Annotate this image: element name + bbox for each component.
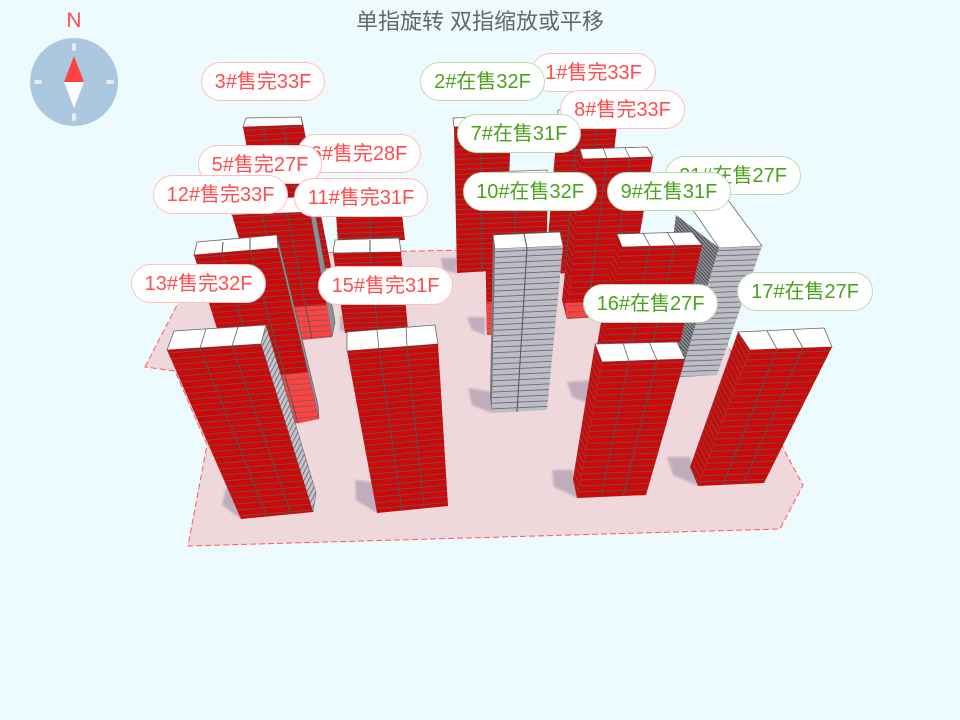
label: 17# <box>737 272 873 311</box>
ground plot <box>145 250 803 546</box>
label: 21# <box>665 156 801 195</box>
label: 15# <box>318 266 453 305</box>
label: 6#: 6#售完28F <box>311 143 407 165</box>
label: 12#: 12#售完33F <box>167 184 274 206</box>
label: 2#: 2#在售32F <box>434 71 531 93</box>
label: 8# <box>560 90 685 129</box>
tower 12# <box>194 235 319 428</box>
building shadows <box>222 258 698 519</box>
label: 3# <box>201 62 325 101</box>
label: 11# <box>294 178 428 217</box>
label: 17#: 17#在售27F <box>751 281 859 303</box>
label: 13#: 13#售完32F <box>145 273 252 295</box>
tower 6# <box>335 197 405 242</box>
label: 11#: 11#售完31F <box>308 187 414 209</box>
label: 9# <box>607 172 731 211</box>
tower 1# <box>545 106 618 274</box>
tower 15# <box>347 325 448 513</box>
compass <box>30 38 118 126</box>
tower 11# <box>333 238 408 333</box>
label: 5#: 5#售完27F <box>212 154 308 176</box>
label: 12# <box>153 175 288 214</box>
tower 9# <box>597 232 702 346</box>
label: 1#: 1#售完33F <box>545 62 642 84</box>
label: 7# <box>457 114 581 153</box>
tower 13# <box>167 325 316 519</box>
tower 5# <box>228 197 335 342</box>
tower 3# <box>243 117 331 272</box>
label: 1# <box>531 53 656 92</box>
label: 7#: 7#在售31F <box>471 123 567 145</box>
label: 3#: 3#售完33F <box>215 71 311 93</box>
label: 13# <box>131 264 266 303</box>
tower 10# (grey) <box>490 232 563 413</box>
tower 2# <box>453 116 511 273</box>
label: 9#: 9#在售31F <box>621 181 717 203</box>
label: 10#: 10#在售32F <box>476 181 584 203</box>
tower 16# <box>573 342 685 498</box>
label: 5# <box>198 145 322 184</box>
label: 6# <box>297 134 421 173</box>
label: 8#: 8#售完33F <box>574 99 671 121</box>
title hint: 单指旋转 双指缩放或平移 <box>356 9 604 34</box>
tower 21# (grey) <box>660 197 762 377</box>
label: 21#: 21#在售27F <box>679 165 787 187</box>
label: 16# <box>583 284 718 323</box>
label: 15#: 15#售完31F <box>332 275 439 297</box>
label: 2# <box>420 62 545 101</box>
compass north letter: N <box>66 9 82 32</box>
label: 16#: 16#在售27F <box>597 293 704 315</box>
tower 8# <box>562 147 653 319</box>
tower 7# <box>484 170 548 335</box>
tower 17# <box>690 328 832 486</box>
label: 10# <box>463 172 597 211</box>
